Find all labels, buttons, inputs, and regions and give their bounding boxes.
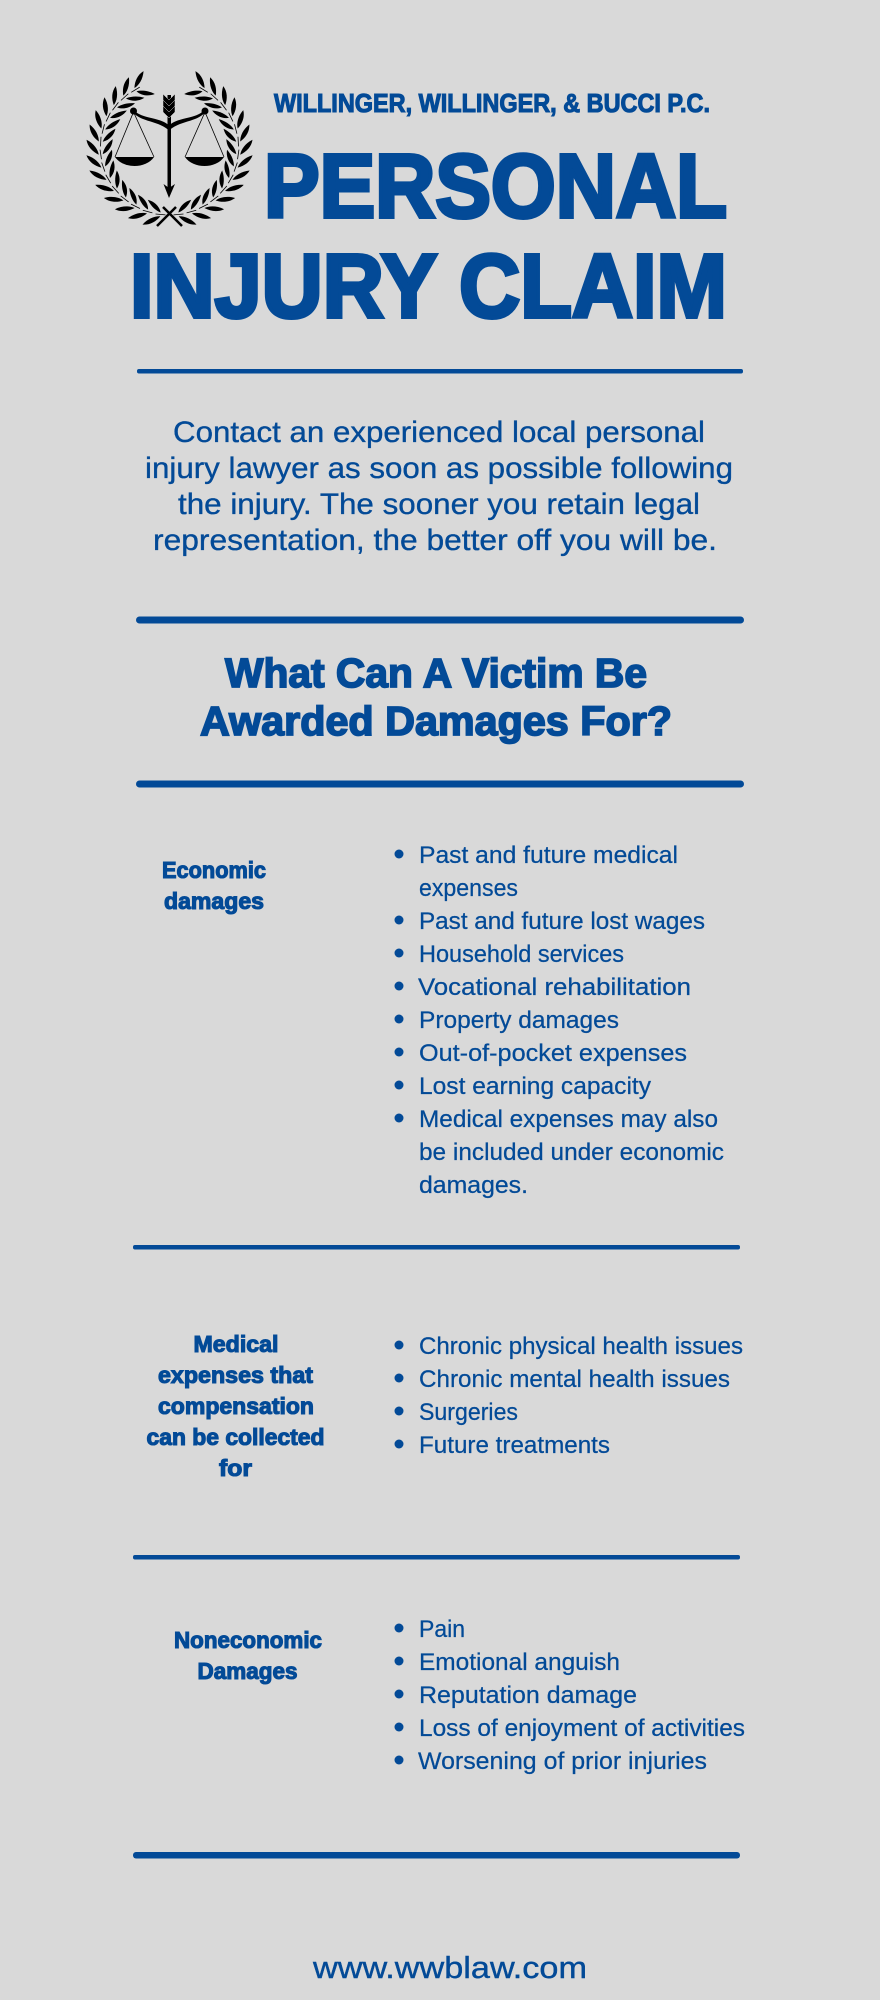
right pan: [185, 112, 224, 166]
divider: [133, 1245, 740, 1250]
label: medical expenses: compensation: [158, 1393, 314, 1419]
label: economic damages: damages: [164, 888, 264, 914]
list: economic damages: Lost earning capacity: [419, 1073, 651, 1100]
list: noneconomic damages: [394, 1616, 745, 1775]
crossed stems: [157, 207, 182, 226]
left pan: [115, 112, 154, 166]
list: medical expenses: Chronic physical health issues: [419, 1333, 743, 1360]
list: economic damages: damages.: [419, 1172, 528, 1199]
section heading: Awarded Damages For?: [200, 698, 672, 744]
list: economic damages: Property damages: [419, 1007, 619, 1034]
title: [130, 137, 727, 337]
divider: [136, 616, 744, 624]
beam knobs: [130, 108, 208, 114]
list: medical expenses: Surgeries: [419, 1399, 518, 1426]
arrow head: [164, 184, 175, 198]
label: noneconomic damages: [174, 1627, 322, 1684]
label: noneconomic damages: Damages: [198, 1658, 298, 1684]
label: medical expenses: can be collected: [146, 1424, 324, 1450]
firm name: WILLINGER, WILLINGER, & BUCCI P.C.: [274, 88, 710, 118]
intro paragraph: representation, the better off you will be.: [153, 524, 717, 557]
label: noneconomic damages: Noneconomic: [174, 1627, 322, 1653]
list: noneconomic damages: Reputation damage: [419, 1682, 637, 1709]
intro paragraph: injury lawyer as soon as possible following: [145, 452, 733, 485]
list: economic damages: Out-of-pocket expenses: [419, 1040, 687, 1067]
list: economic damages: Past and future lost wages: [419, 908, 705, 935]
panel: noneconomic damages: [174, 1616, 745, 1775]
list: economic damages: be included under economic: [419, 1139, 724, 1166]
intro paragraph: Contact an experienced local personal: [173, 416, 705, 449]
section heading: [200, 650, 672, 744]
arrow shaft: [168, 95, 171, 188]
list: medical expenses: Future treatments: [419, 1432, 610, 1459]
divider: [133, 1555, 740, 1560]
divider: [133, 1852, 740, 1858]
label: medical expenses: for: [219, 1455, 252, 1481]
label: economic damages: Economic: [162, 857, 266, 883]
divider: [136, 780, 744, 788]
list: economic damages: Past and future medical: [419, 842, 678, 869]
title: PERSONAL: [264, 137, 727, 237]
intro paragraph: the injury. The sooner you retain legal: [178, 488, 700, 521]
list: noneconomic damages: Worsening of prior injuries: [418, 1748, 707, 1775]
list: economic damages: Household services: [419, 941, 624, 968]
footer url: www.wwblaw.com: [312, 1950, 587, 1985]
label: economic damages: [162, 857, 266, 914]
list: economic damages: Medical expenses may also: [419, 1106, 718, 1133]
label: medical expenses: Medical: [194, 1331, 278, 1357]
panel: economic damages: [162, 842, 724, 1199]
label: medical expenses: [146, 1331, 324, 1481]
list: economic damages: expenses: [419, 875, 518, 902]
list: medical expenses: Chronic mental health issues: [419, 1366, 730, 1393]
title: INJURY CLAIM: [130, 237, 727, 337]
list: economic damages: Vocational rehabilitation: [418, 974, 691, 1001]
section heading: What Can A Victim Be: [225, 650, 647, 696]
scale beam: [133, 110, 205, 130]
intro paragraph: [145, 416, 733, 557]
divider: [137, 369, 743, 374]
laurel left branch: [86, 71, 167, 226]
icon: scales of justice in laurel wreath: [86, 71, 253, 226]
list: noneconomic damages: Emotional anguish: [419, 1649, 620, 1676]
list: noneconomic damages: Loss of enjoyment of activities: [419, 1715, 745, 1742]
arrow fletching: [163, 94, 175, 118]
list: economic damages: [394, 842, 724, 1199]
laurel right branch: [172, 71, 253, 226]
list: noneconomic damages: Pain: [419, 1616, 465, 1643]
panel: medical expenses: [146, 1331, 743, 1481]
label: medical expenses: expenses that: [158, 1362, 313, 1388]
list: medical expenses: [394, 1333, 743, 1459]
